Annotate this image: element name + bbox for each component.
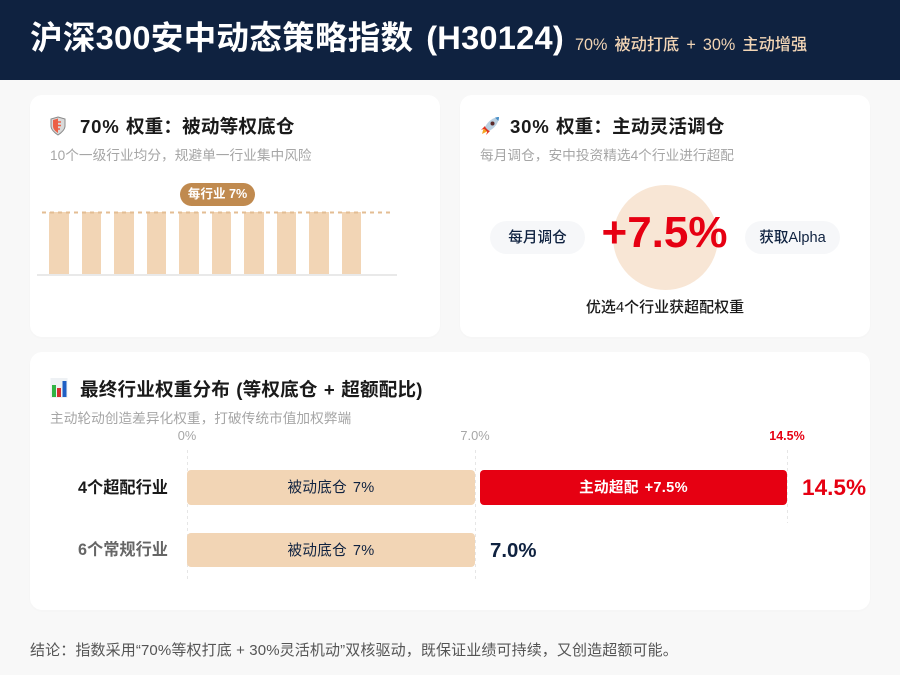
- icon: rocket: [481, 117, 499, 135]
- panel: final weight distribution: [30, 352, 870, 610]
- chart: ten equal bars: [37, 183, 397, 276]
- panel: passive equal-weight base: [30, 95, 440, 337]
- pill: capture alpha: [745, 221, 840, 254]
- caption: overweight sectors: 优选4个行业获超配权重: [586, 299, 744, 316]
- pill: capture alpha: 获取Alpha: [759, 230, 826, 246]
- row label: overweight: 4个超配行业: [78, 478, 168, 496]
- icon: bar chart: [50, 378, 68, 398]
- bar: passive base: 被动底仓 7%: [287, 480, 375, 496]
- circle highlight: [612, 184, 718, 290]
- bar: active overweight: [480, 470, 787, 505]
- heading: distribution: 最终行业权重分布 (等权底仓 + 超额配比): [80, 378, 423, 400]
- panel: active rebalancing: [460, 95, 870, 337]
- text: distribution description: 主动轮动创造差异化权重，打破传统市值加权弊端: [50, 410, 351, 426]
- row label: regular: 6个常规行业: [78, 541, 168, 559]
- conclusion text: 结论：指数采用“70%等权打底 + 30%灵活机动”双核驱动，既保证业绩可持续，又创造超额可能。: [30, 642, 678, 659]
- title: 沪深300安中动态策略指数 (H30124): [30, 19, 564, 56]
- bar: active overweight: 主动超配 +7.5%: [579, 480, 688, 496]
- pill: monthly rebalance: 每月调仓: [508, 230, 567, 246]
- bar: passive base: [187, 470, 475, 505]
- heading: passive: 70% 权重：被动等权底仓: [80, 116, 295, 136]
- label pill: 7% per sector: 每行业 7%: [188, 186, 247, 200]
- text: active description: 每月调仓，安中投资精选4个行业进行超配: [480, 148, 734, 162]
- heading: active: 30% 权重：主动灵活调仓: [510, 116, 725, 136]
- value: 14.5%: 14.5%: [802, 474, 866, 500]
- pill: monthly rebalance: [490, 221, 585, 254]
- big number: +7.5%: +7.5%: [602, 208, 727, 257]
- bar: passive base regular: [187, 532, 475, 567]
- header band: [0, 0, 900, 80]
- chart: stacked bars: 7.0%: [460, 428, 490, 443]
- chart: stacked bars: 0%: [178, 428, 196, 443]
- icon: shield: [50, 116, 66, 136]
- value: 7.0%: 7.0%: [490, 540, 536, 562]
- chart: stacked bars: [78, 428, 866, 579]
- label pill: 7% per sector: [180, 182, 255, 206]
- text: passive description: 10个一级行业均分，规避单一行业集中风险: [50, 148, 312, 162]
- chart: stacked bars: 14.5%: [769, 428, 805, 442]
- bar: passive base regular: 被动底仓 7%: [287, 542, 375, 558]
- subtitle: 70% 被动打底 + 30% 主动增强: [575, 36, 807, 54]
